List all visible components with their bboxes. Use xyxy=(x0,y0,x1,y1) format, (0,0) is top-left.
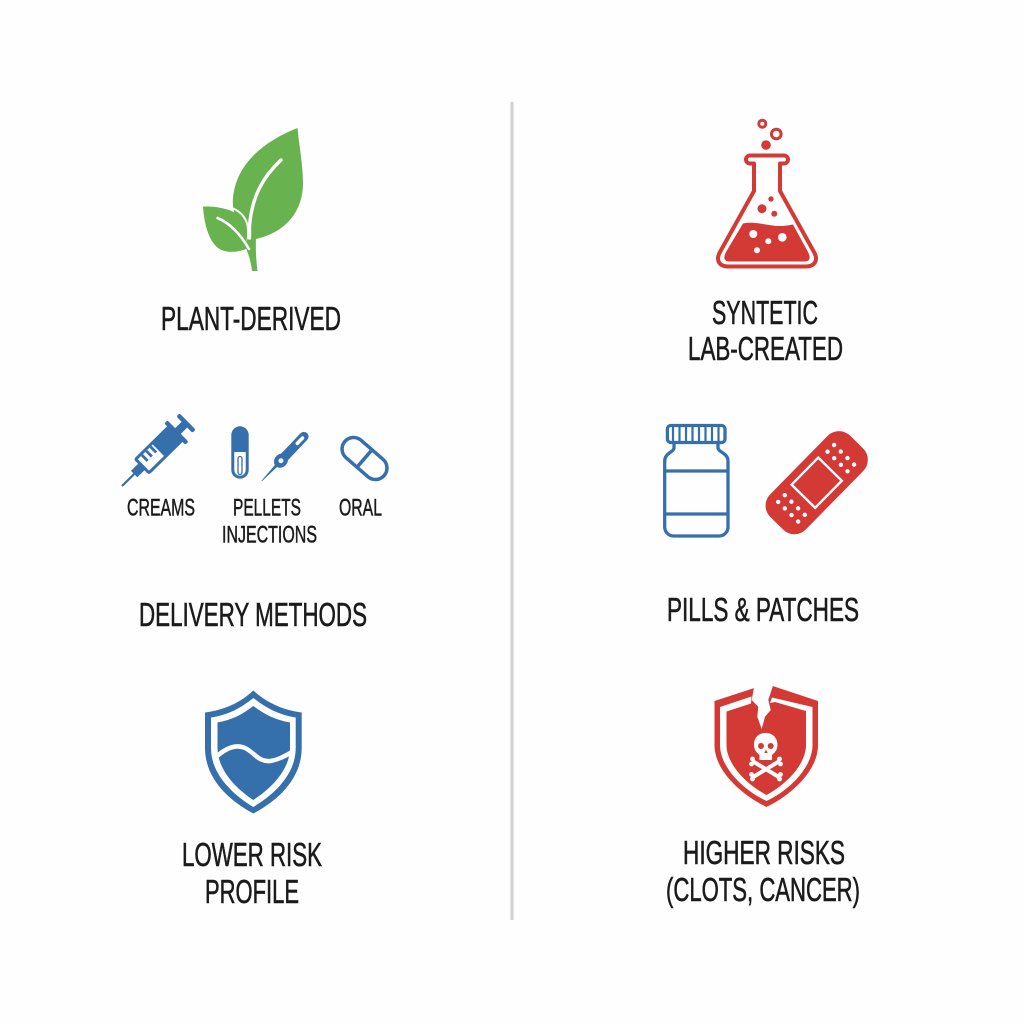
icon: adhesive bandage xyxy=(759,425,874,541)
label: syntetic lab-created: LAB-CREATED xyxy=(688,330,843,367)
label: plant-derived: PLANT-DERIVED xyxy=(161,300,341,337)
icon: injection needle xyxy=(257,429,312,485)
label: higher risks: (CLOTS, CANCER) xyxy=(666,871,860,908)
label: injections: INJECTIONS xyxy=(222,522,317,548)
icon: syringe xyxy=(111,411,198,497)
icon: oral capsule xyxy=(337,433,392,484)
icon: pill bottle xyxy=(665,426,728,536)
label: lower risk profile: PROFILE xyxy=(205,873,299,910)
heading: delivery methods: DELIVERY METHODS xyxy=(139,596,367,633)
label: higher risks: HIGHER RISKS xyxy=(683,834,845,871)
label: oral: ORAL xyxy=(339,494,382,522)
label: syntetic lab-created: SYNTETIC xyxy=(712,294,818,331)
icon: cracked shield with skull xyxy=(714,684,818,807)
label: pellets: PELLETS xyxy=(233,494,301,522)
label: syntetic lab-created xyxy=(688,294,843,367)
label: lower risk profile xyxy=(182,836,322,910)
label: creams: CREAMS xyxy=(127,494,195,522)
icon: green leaf xyxy=(203,128,303,271)
icon: blue shield xyxy=(205,690,302,814)
icon: pellet capsule xyxy=(231,426,249,479)
label: lower risk profile: LOWER RISK xyxy=(182,836,322,873)
icon: lab flask xyxy=(718,120,816,266)
label: higher risks xyxy=(666,834,860,908)
label: pills and patches: PILLS & PATCHES xyxy=(667,591,859,628)
